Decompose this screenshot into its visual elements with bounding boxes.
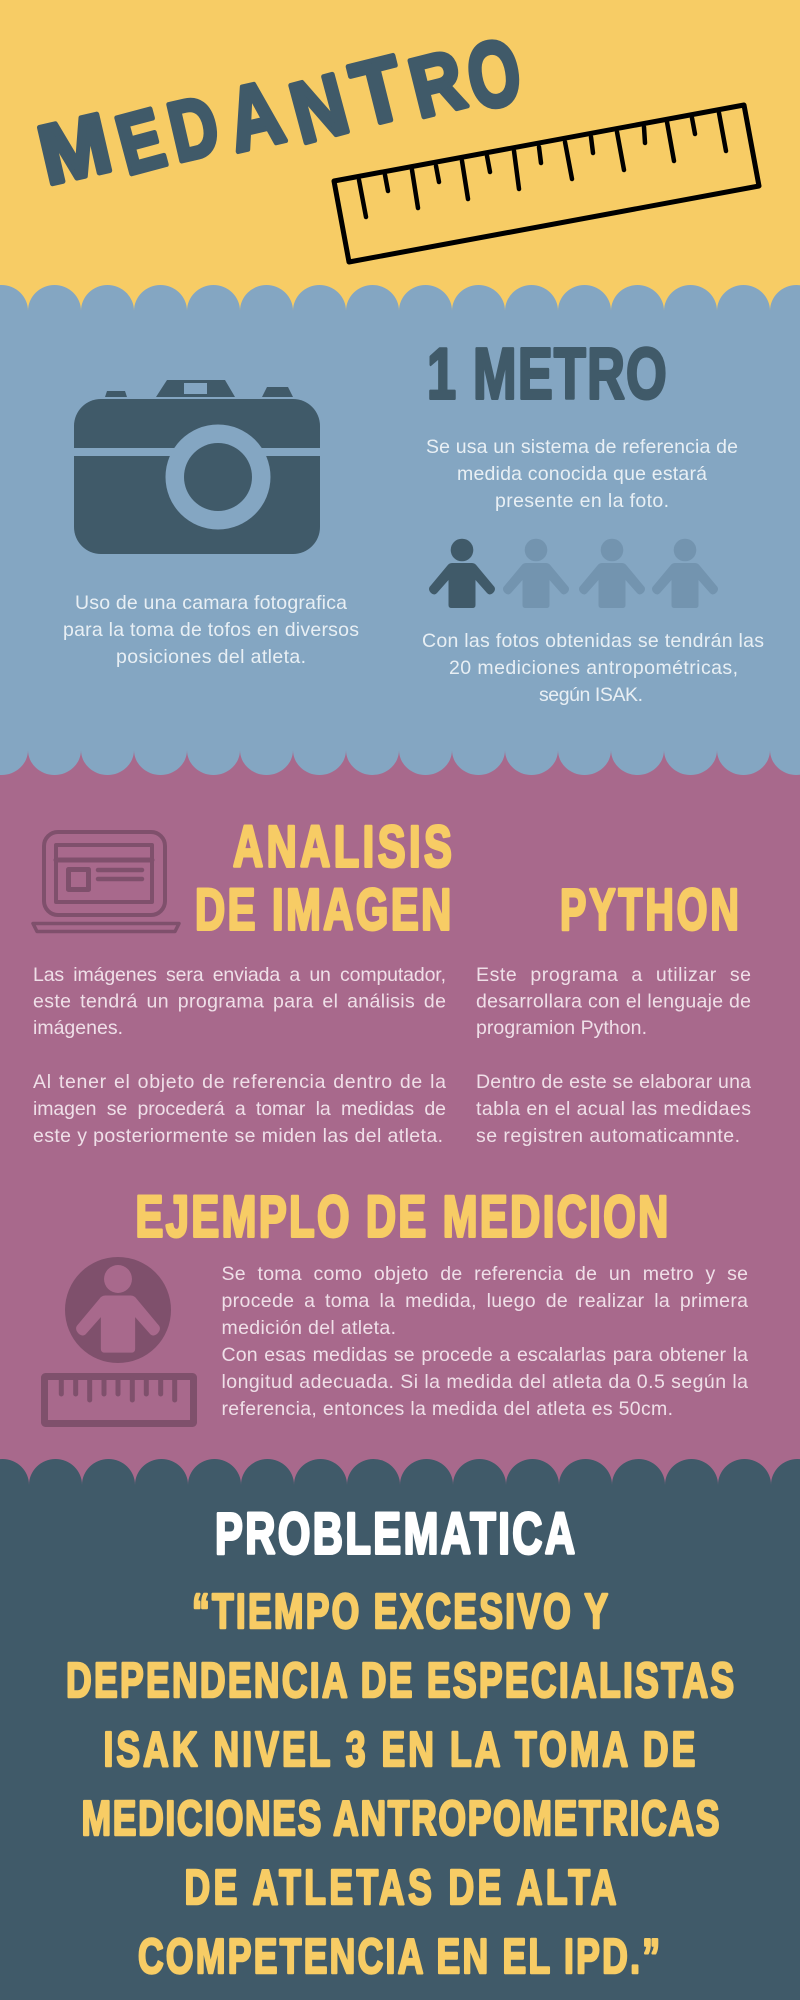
- icon: camera: [74, 380, 320, 554]
- text: reference system: medida conocida que estará: [457, 463, 707, 485]
- text: image analysis description: este y posteriormente se miden las del atleta.: [33, 1125, 443, 1147]
- text: problem statement: “TIEMPO EXCESIVO Y: [192, 1584, 608, 1639]
- text: camera description: para la toma de tofos en diversos: [63, 619, 359, 641]
- panel: problem section with scalloped edge: [0, 1459, 800, 2000]
- title: M: [30, 95, 119, 203]
- text: python description: desarrollara con el lenguaje de: [476, 990, 751, 1012]
- text: image analysis description: [33, 964, 446, 1147]
- text: image analysis description: imagen se procederá a tomar la medidas de: [33, 1098, 446, 1120]
- title: R: [400, 31, 473, 136]
- panel: analysis background: [0, 745, 800, 1490]
- text: python description: tabla en el acual las medidaes: [476, 1098, 751, 1120]
- text: python description: [476, 964, 751, 1147]
- text: problem statement: DEPENDENCIA DE ESPECIALISTAS: [66, 1653, 734, 1708]
- heading: problematica: PROBLEMATICA: [215, 1501, 575, 1566]
- text: camera description: posiciones del atleta.: [116, 646, 306, 668]
- title: [30, 19, 528, 203]
- text: reference system: presente en la foto.: [495, 490, 669, 512]
- text: image analysis description: imágenes.: [33, 1017, 123, 1039]
- title: E: [107, 90, 174, 192]
- icon: row of people: [429, 539, 718, 608]
- icon: person in circle: [65, 1257, 171, 1363]
- heading: python: PYTHON: [560, 877, 739, 942]
- text: python description: Este programa a utilizar se: [476, 964, 751, 986]
- text: image analysis description: este tendrá un programa para el análisis de: [33, 990, 446, 1012]
- panel: header background: [0, 0, 800, 311]
- title: N: [281, 55, 357, 162]
- text: problem statement: [66, 1584, 734, 1984]
- text: measurement example: referencia, entonces la medida del atleta es 50cm.: [222, 1398, 673, 1420]
- heading: analisis de imagen: DE IMAGEN: [195, 877, 451, 942]
- text: python description: programion Python.: [476, 1017, 647, 1039]
- heading: analisis de imagen: ANALISIS: [233, 814, 452, 879]
- heading: 1 metro: 1 METRO: [427, 334, 667, 415]
- text: python description: Dentro de este se elaborar una: [476, 1071, 751, 1093]
- text: problem statement: ISAK NIVEL 3 EN LA TOMA DE: [104, 1722, 695, 1777]
- icon: ruler: [334, 105, 759, 262]
- text: measurement example: Con esas medidas se procede a escalarlas para obtener la: [222, 1344, 748, 1366]
- text: camera description: Uso de una camara fotografica: [75, 592, 347, 614]
- text: measurement example: procede a toma la medida, luego de realizar la primera: [222, 1290, 748, 1312]
- text: measurement example: longitud adecuada. Si la medida del atleta da 0.5 según la: [222, 1371, 748, 1393]
- title: D: [160, 77, 227, 179]
- text: measurement example: medición del atleta.: [222, 1317, 396, 1339]
- text: reference system: Se usa un sistema de referencia de: [426, 436, 738, 458]
- panel: blue section with scalloped edges: [0, 285, 800, 775]
- text: measurements: según ISAK.: [539, 684, 643, 706]
- text: problem statement: MEDICIONES ANTROPOMETRICAS: [82, 1791, 719, 1846]
- title: O: [459, 19, 528, 129]
- text: problem statement: COMPETENCIA EN EL IPD.”: [138, 1929, 660, 1984]
- title: A: [218, 62, 292, 171]
- icon: laptop: [33, 832, 179, 932]
- text: measurements: 20 mediciones antropométricas,: [449, 657, 738, 679]
- heading: ejemplo de medicion: EJEMPLO DE MEDICION: [136, 1184, 668, 1249]
- text: reference system: [426, 436, 738, 512]
- text: problem statement: DE ATLETAS DE ALTA: [184, 1860, 616, 1915]
- text: measurement example: Se toma como objeto de referencia de un metro y se: [222, 1263, 748, 1285]
- text: python description: se registren automaticamnte.: [476, 1125, 740, 1147]
- text: image analysis description: Al tener el objeto de referencia dentro de la: [33, 1071, 446, 1093]
- text: image analysis description: Las imágenes sera enviada a un computador,: [33, 964, 446, 986]
- text: measurements: [422, 630, 764, 706]
- text: measurement example: [222, 1263, 748, 1420]
- heading: analisis de imagen: [195, 814, 452, 942]
- text: measurements: Con las fotos obtenidas se tendrán las: [422, 630, 764, 652]
- icon: small ruler: [44, 1376, 194, 1424]
- text: camera description: [63, 592, 359, 668]
- title: T: [342, 36, 414, 146]
